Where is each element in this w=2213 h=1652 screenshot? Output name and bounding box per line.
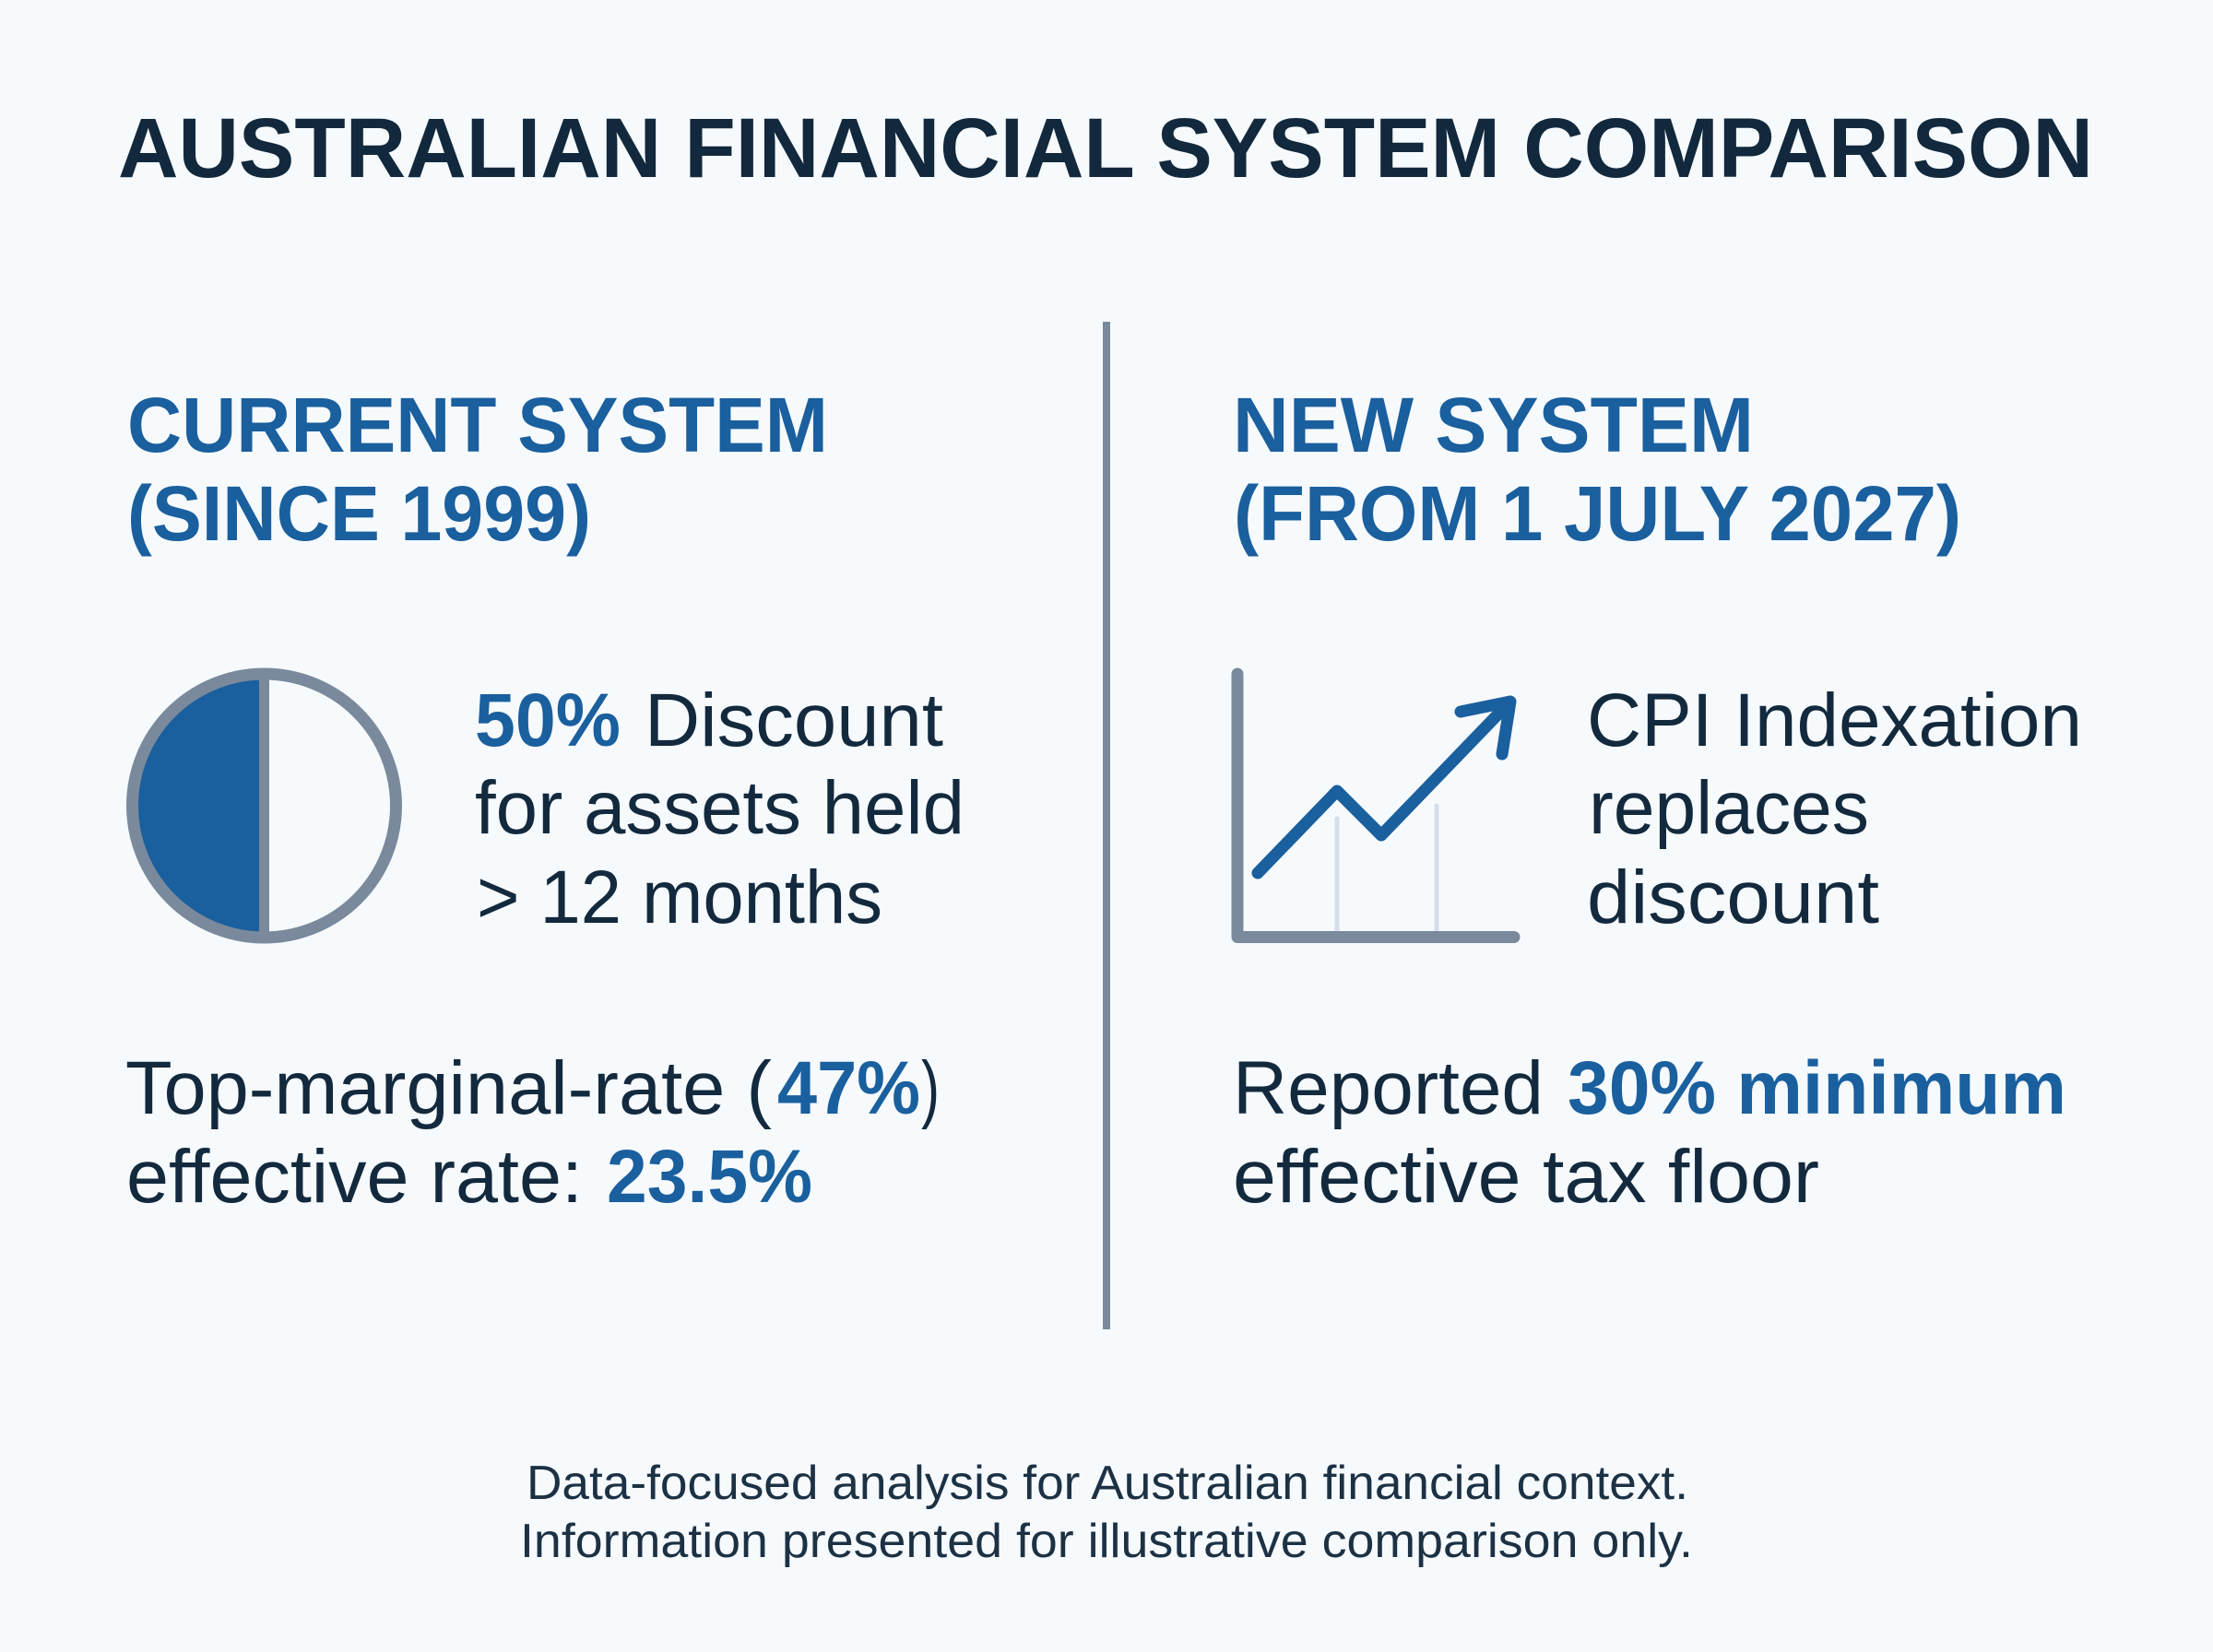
- text: top marginal rate: [125, 1046, 940, 1219]
- heading: new system: [1233, 382, 1961, 557]
- footer note: Information presented for illustrative comparison only.: [520, 1515, 1693, 1568]
- panel: current system: [125, 382, 964, 1219]
- text: 50% discount: 50%: [475, 678, 621, 762]
- footer note: Data-focused analysis for Australian financial context.: [527, 1457, 1688, 1510]
- text: 50% discount: for assets held: [475, 766, 964, 850]
- heading: current system: [127, 382, 828, 557]
- title: AUSTRALIAN FINANCIAL SYSTEM COMPARISON: [118, 101, 2093, 195]
- icon: half-filled circle: [133, 674, 396, 938]
- text: reported minimum: Reported: [1233, 1046, 1544, 1130]
- text: 50% discount: Discount: [645, 678, 943, 762]
- text: top marginal rate: 47%: [777, 1046, 920, 1130]
- text: CPI indexation: discount: [1587, 856, 1879, 939]
- text: top marginal rate: ): [921, 1046, 940, 1130]
- text: top marginal rate: 23.5%: [607, 1135, 812, 1219]
- text: 50% discount: [475, 678, 964, 939]
- text: CPI indexation: CPI Indexation: [1587, 678, 2082, 762]
- text: top marginal rate: effective rate:: [126, 1135, 583, 1219]
- text: reported minimum: [1233, 1046, 2066, 1219]
- heading: current system: CURRENT SYSTEM: [127, 382, 828, 468]
- icon: line chart with rising arrow: [1237, 674, 1514, 937]
- panel: new system: [1233, 382, 2082, 1219]
- footer note: [520, 1457, 1693, 1568]
- text: reported minimum: effective tax floor: [1233, 1135, 1819, 1219]
- heading: current system: (SINCE 1999): [127, 470, 591, 557]
- text: top marginal rate: Top-marginal-rate (: [125, 1046, 772, 1130]
- heading: new system: NEW SYSTEM: [1233, 382, 1754, 468]
- text: 50% discount: > 12 months: [477, 856, 882, 939]
- divider: [1103, 322, 1110, 1329]
- text: CPI indexation: [1587, 678, 2082, 939]
- text: CPI indexation: replaces: [1589, 766, 1869, 850]
- heading: new system: (FROM 1 JULY 2027): [1234, 470, 1961, 557]
- text: reported minimum: 30% minimum: [1568, 1046, 2066, 1130]
